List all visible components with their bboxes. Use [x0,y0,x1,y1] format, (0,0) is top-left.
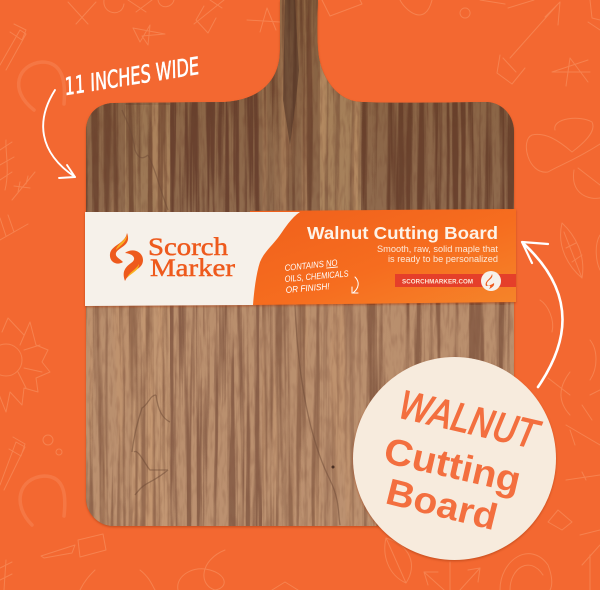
doodle: branch left [0,215,28,240]
cutting board [80,0,521,530]
badge heading: Cutting [380,430,525,501]
badge heading [380,430,525,538]
doodle: horseshoe bottom [20,476,65,525]
doodle: arrow top [194,0,224,33]
doodle: horseshoe corner [500,554,552,590]
doodle: foliage bottom [0,560,12,590]
logo text: Marker [150,253,236,282]
band: orange panel [250,209,516,305]
note arrow [352,277,358,293]
doodle: star top [133,25,165,45]
badge circle [353,357,556,560]
doodle: star right [552,58,590,86]
doodle: dots [43,435,62,455]
band title: Walnut Cutting Board [307,223,498,243]
logo flame icon [110,233,143,281]
doodle: sunflower [0,318,50,412]
arrow: to board edge [43,90,75,178]
handwritten note: OILS, CHEMICALS [284,268,349,284]
board knot [332,466,334,468]
handwritten note [284,258,349,295]
doodle: clover right [526,118,600,198]
website strip: SCORCHMARKER.COM [402,278,473,286]
doodle: marker lower left [0,437,25,490]
doodle: leaf edge [596,235,600,270]
doodle: star handle [247,8,280,32]
logo text [148,232,236,282]
doodle: marker left [0,24,26,70]
doodle: bottom curves [80,570,155,590]
badge heading: Board [382,471,502,538]
doodle: corner foliage [580,530,600,590]
planks [320,63,361,210]
product band [85,209,516,306]
doodle: right side branch [548,372,600,445]
handwritten note: CONTAINS NO [284,258,338,273]
doodle: foliage left [0,140,35,200]
doodle: bottom leaf [272,582,298,590]
doodle: top right acorn [322,0,534,18]
website strip [395,271,516,291]
doodle: paint brush [41,534,106,558]
arrow: to band [522,242,562,387]
doodle: right side curves [540,300,596,380]
doodle: right side lower [548,472,600,530]
doodle: xoxo [68,0,174,24]
doodle: swirl bottom [178,550,225,590]
lower board lightening [80,305,520,530]
doodle: arrow right [497,2,560,84]
handle dark streak [283,0,299,145]
doodle: bottom leaf left [385,538,412,583]
band: cream panel [85,212,300,306]
handwritten note: OR FINISH! [285,281,330,295]
band description: is ready to be personalized [388,254,498,265]
doodle: horseshoe top [19,62,64,110]
label: 11 inches wide: 11 INCHES WIDE [63,52,202,101]
grain marks [122,110,340,525]
band description [377,244,498,265]
doodle: top right corner [588,0,600,30]
logo text: Scorch [148,232,228,261]
badge handwritten word: WALNUT [395,383,545,458]
doodle: bottom arrows [424,562,480,590]
doodle: leaf right [561,223,583,278]
band description: Smooth, raw, solid maple that [377,244,498,255]
